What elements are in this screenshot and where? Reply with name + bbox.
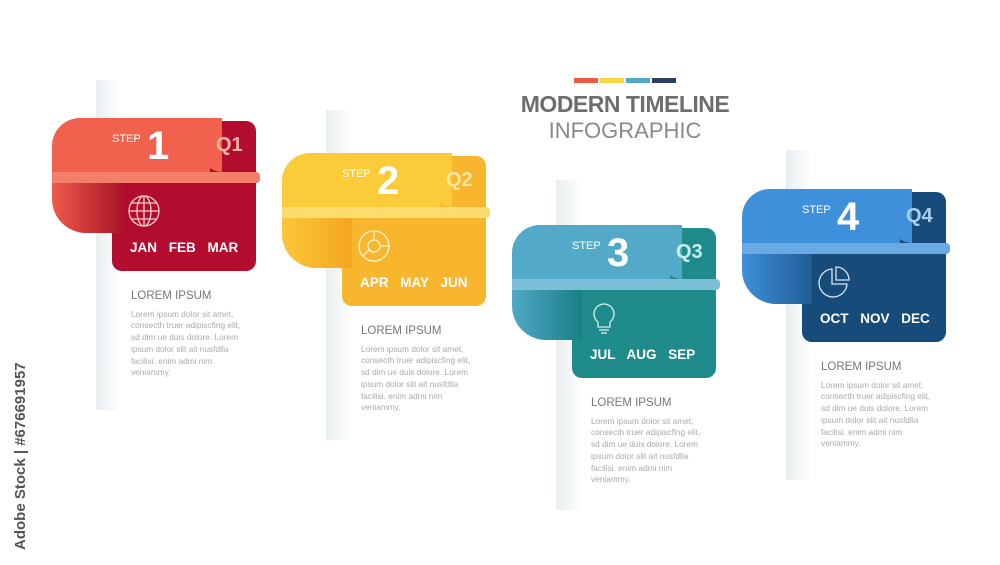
step 4: OCT NOV DEC: [820, 311, 930, 326]
step 2: STEP: [342, 168, 371, 180]
step 1: 1: [147, 124, 169, 168]
icon: globe: [128, 195, 160, 227]
step 3: STEP: [572, 240, 601, 252]
step 4: 4: [837, 195, 859, 239]
step 2: Q2: [446, 169, 473, 191]
step 3: Q3: [676, 241, 703, 263]
text block 1: Lorem ipsum dolor sit amet, consecth truer adipiscfing elit, sd dim ue duis dolore. Lorem ipsum dolor slit ait nusfdlla facilisi. enim admi nim veniammy.: [131, 309, 240, 377]
step 4: Q4: [906, 205, 933, 227]
text block 4: LOREM IPSUM: [821, 361, 902, 373]
title: INFOGRAPHIC: [549, 118, 701, 143]
icon: bulb: [593, 303, 615, 334]
watermark: Adobe Stock | #676691957: [12, 362, 29, 550]
color bar: [574, 78, 676, 83]
icon: chart ring: [358, 230, 390, 262]
title: MODERN TIMELINE: [521, 91, 729, 117]
text block 3: LOREM IPSUM: [591, 397, 672, 409]
text block 2: Lorem ipsum dolor sit amet, consecth truer adipiscfing elit, sd dim ue duis dolore. Lorem ipsum dolor slit ait nusfdlla facilisi. enim admi nim veniammy.: [361, 344, 470, 412]
step 2: APR MAY JUN: [360, 275, 468, 290]
text block 1: LOREM IPSUM: [131, 290, 212, 302]
step 3: [512, 225, 720, 484]
step 2: 2: [377, 159, 399, 203]
step 4: [742, 189, 950, 448]
step 3: JUL AUG SEP: [590, 347, 695, 362]
text block 4: Lorem ipsum dolor sit amet, consecth truer adipiscfing elit, sd dim ue duis dolore. Lorem ipsum dolor slit ait nusfdlla facilisi. enim admi nim veniammy.: [821, 380, 930, 448]
step 2: [282, 153, 490, 412]
step 1: JAN FEB MAR: [130, 240, 238, 255]
step 1: STEP: [112, 133, 141, 145]
title: [521, 78, 729, 143]
step 1: [52, 118, 260, 377]
step 1: Q1: [216, 134, 243, 156]
step 4: STEP: [802, 204, 831, 216]
text block 2: LOREM IPSUM: [361, 325, 442, 337]
text block 3: Lorem ipsum dolor sit amet, consecth truer adipiscfing elit, sd dim ue duis dolore. Lorem ipsum dolor slit ait nusfdlla facilisi. enim admi nim veniammy.: [591, 416, 700, 484]
icon: pie: [818, 266, 850, 298]
step 3: 3: [607, 231, 629, 275]
